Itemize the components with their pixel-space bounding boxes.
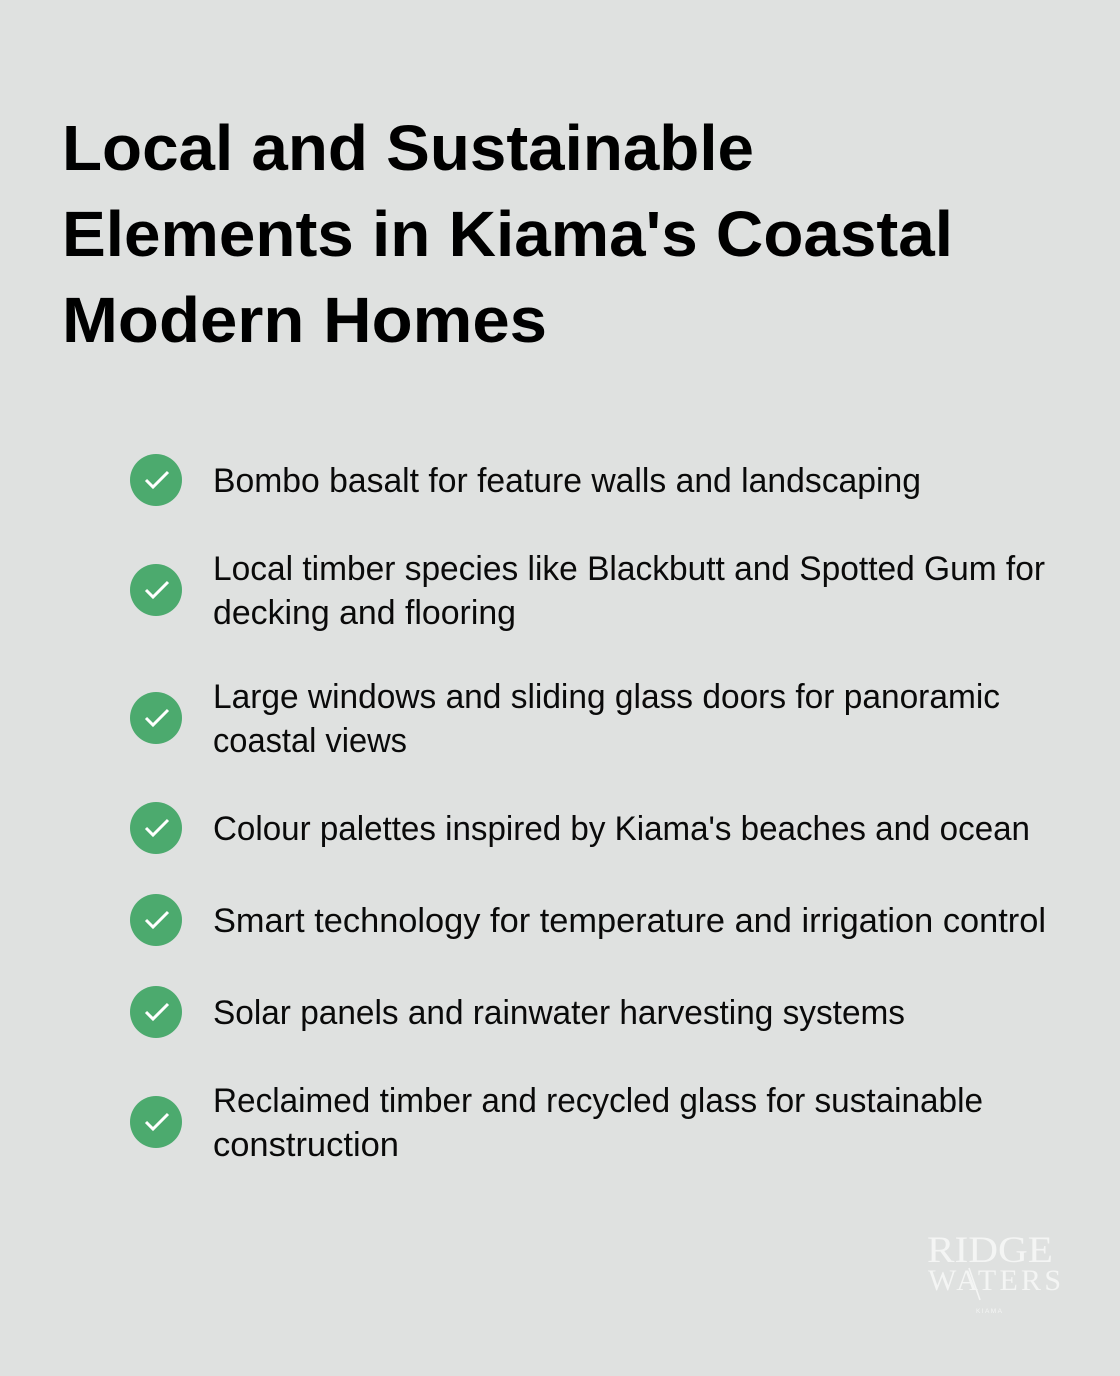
item: reclaimed timber: Reclaimed timber and recycled glass for sustainable <box>213 1082 983 1120</box>
title: Local and Sustainable <box>62 112 754 184</box>
item: smart technology: Smart technology for temperature and irrigation control <box>213 902 1046 940</box>
item: local timber: decking and flooring <box>213 594 516 632</box>
item: large windows <box>130 678 1000 760</box>
item: large windows: coastal views <box>213 722 407 760</box>
title: Modern Homes <box>62 284 547 356</box>
item: Bombo basalt <box>130 454 921 506</box>
title <box>62 112 953 356</box>
checklist <box>130 454 1046 1164</box>
item: Bombo basalt: Bombo basalt for feature walls and landscaping <box>213 462 921 500</box>
item: local timber: Local timber species like Blackbutt and Spotted Gum for <box>213 550 1045 588</box>
item: colour palettes: Colour palettes inspired by Kiama's beaches and ocean <box>213 810 1030 848</box>
logo: Ridge Waters Kiama: WATERS <box>928 1264 1061 1297</box>
logo: Ridge Waters Kiama: KIAMA <box>976 1308 1003 1315</box>
item: local timber <box>130 550 1045 632</box>
logo: Ridge Waters Kiama <box>927 1230 1061 1315</box>
item: reclaimed timber: construction <box>213 1126 399 1164</box>
item: large windows: Large windows and sliding glass doors for panoramic <box>213 678 1000 716</box>
logo: Ridge Waters Kiama: RIDGE <box>927 1230 1053 1271</box>
title: Elements in Kiama's Coastal <box>62 198 953 270</box>
item: reclaimed timber <box>130 1082 983 1164</box>
item: colour palettes <box>130 802 1030 854</box>
item: solar panels <box>130 986 905 1038</box>
item: smart technology <box>130 894 1046 946</box>
item: solar panels: Solar panels and rainwater harvesting systems <box>213 994 905 1032</box>
